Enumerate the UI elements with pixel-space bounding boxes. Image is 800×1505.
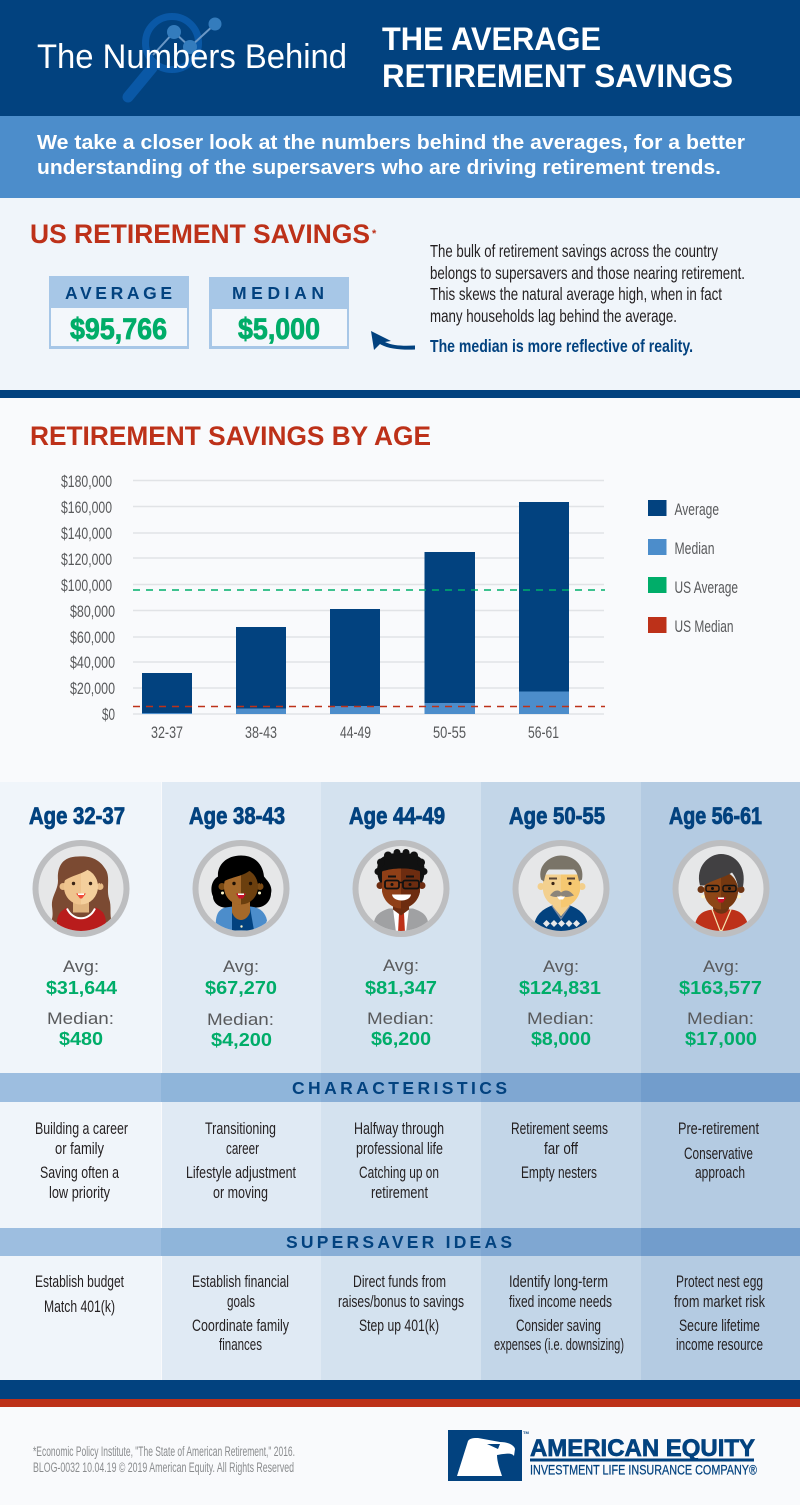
band: supersaver ideas [0, 1228, 800, 1256]
intro band [0, 116, 800, 198]
characteristics: column text: Saving often a [40, 1164, 120, 1182]
average value [46, 957, 118, 998]
supersaver ideas: column text: Direct funds from [353, 1273, 446, 1291]
characteristics: column text: or moving [213, 1184, 268, 1202]
y axis labels: $60,000 [70, 629, 115, 647]
card: median: MEDIAN [232, 283, 324, 303]
characteristics: column text: retirement [371, 1184, 428, 1202]
panel: US retirement savings [0, 198, 800, 390]
band: characteristics: CHARACTERISTICS [292, 1078, 507, 1098]
average value: $81,347 [365, 977, 437, 998]
card: average: AVERAGE [65, 283, 172, 303]
callout: median is more reflective: The median is more reflective of reality. [430, 336, 693, 356]
characteristics: column text: Retirement seems [511, 1120, 608, 1138]
text block: explanation: many households lag behind the average. [430, 306, 677, 326]
y axis labels [61, 473, 115, 724]
y axis labels: $40,000 [70, 654, 115, 672]
chart legend [648, 500, 738, 636]
median value: $4,200 [211, 1029, 272, 1050]
header banner [0, 0, 800, 116]
x axis labels: 56-61 [528, 724, 559, 742]
supersaver ideas: column text [35, 1273, 766, 1354]
characteristics: column text [35, 1120, 759, 1202]
average value [679, 957, 762, 998]
average value: Avg: [223, 957, 259, 976]
median value [527, 1009, 594, 1049]
header kicker: The Numbers Behind [37, 38, 347, 76]
heading: US retirement savings: US RETIREMENT SAVINGS [30, 219, 370, 249]
column: age 32-37 [29, 803, 130, 1049]
y axis labels: $100,000 [61, 577, 112, 595]
supersaver ideas: column text: Establish budget [35, 1273, 124, 1291]
supersaver ideas: column text: expenses (i.e. downsizing) [494, 1336, 624, 1354]
heading: Age 50-55 [509, 803, 605, 830]
chart legend: Median [674, 540, 714, 558]
logo: American Equity: TM [523, 1430, 529, 1435]
arrow pointing to median [371, 331, 415, 350]
panel: age columns background [0, 782, 800, 1380]
heading: Age 38-43 [189, 803, 285, 830]
icon: young woman avatar [32, 840, 130, 937]
x axis labels [151, 724, 559, 742]
card: average [49, 276, 189, 349]
median value: Median: [527, 1009, 594, 1028]
average value [519, 957, 601, 998]
characteristics: column text: professional life [356, 1140, 443, 1158]
supersaver ideas: column text: Identify long-term [509, 1273, 608, 1291]
median value [207, 1010, 274, 1050]
characteristics: column text: or family [55, 1140, 105, 1158]
supersaver ideas: column text: finances [219, 1336, 262, 1354]
logo: American Equity: AMERICAN EQUITY [530, 1435, 755, 1462]
heading: retirement savings by age: RETIREMENT SAVINGS BY AGE [30, 421, 431, 451]
median value: Median: [687, 1009, 754, 1028]
characteristics: column text: low priority [49, 1184, 111, 1202]
chart legend: Average [674, 501, 719, 519]
column: age 50-55 [509, 803, 610, 1049]
average value: $124,831 [519, 977, 601, 998]
median value: Median: [367, 1009, 434, 1028]
band: characteristics [0, 1073, 800, 1102]
median value: $17,000 [685, 1028, 757, 1049]
supersaver ideas: column text: goals [227, 1293, 255, 1311]
column: age 44-49 [349, 803, 450, 1049]
supersaver ideas: column text: Secure lifetime [679, 1317, 760, 1335]
supersaver ideas: column text: Consider saving [516, 1317, 601, 1335]
characteristics: column text: career [226, 1140, 259, 1158]
main title: THE AVERAGE [382, 21, 601, 57]
heading: Age 44-49 [349, 803, 445, 830]
x axis labels: 50-55 [433, 724, 466, 742]
bar chart [61, 473, 605, 742]
characteristics: column text: Conservative [684, 1145, 753, 1163]
characteristics: column text: Pre-retirement [678, 1120, 759, 1138]
supersaver ideas: column text: Match 401(k) [44, 1298, 115, 1316]
average value: Avg: [383, 956, 419, 975]
supersaver ideas: column text: income resource [676, 1336, 763, 1354]
y axis labels: $120,000 [61, 551, 112, 569]
y axis labels: $0 [102, 706, 115, 724]
chart legend: US Average [674, 579, 738, 597]
column: age 56-61 [669, 803, 770, 1049]
characteristics: column text: Lifestyle adjustment [186, 1164, 296, 1182]
icon: man with moustache avatar [512, 840, 610, 937]
x axis labels: 44-49 [340, 724, 371, 742]
supersaver ideas: column text: fixed income needs [509, 1293, 612, 1311]
icon: man with glasses and tie avatar [352, 840, 450, 937]
average value: Avg: [63, 957, 99, 976]
supersaver ideas: column text: Protect nest egg [676, 1273, 763, 1291]
chart legend: US Median [674, 618, 734, 636]
supersaver ideas: column text: raises/bonus to savings [338, 1293, 464, 1311]
y axis labels: $180,000 [61, 473, 112, 491]
main title: RETIREMENT SAVINGS [382, 58, 733, 94]
average value [365, 956, 437, 998]
y axis labels: $20,000 [70, 680, 115, 698]
median value: Median: [47, 1009, 114, 1028]
characteristics: column text: Halfway through [354, 1120, 444, 1138]
median value: $8,000 [531, 1028, 591, 1049]
average value: Avg: [703, 957, 739, 976]
median value [367, 1009, 434, 1049]
reference line: US average [133, 589, 605, 591]
logo: American Equity [448, 1430, 757, 1481]
heading: Age 56-61 [669, 803, 762, 830]
x axis labels: 38-43 [245, 724, 277, 742]
card: median [209, 277, 349, 349]
average value: $67,270 [205, 977, 277, 998]
heading: US retirement savings: * [372, 228, 377, 240]
supersaver ideas: column text: Coordinate family [192, 1317, 290, 1335]
median value: $6,200 [371, 1028, 431, 1049]
reference line: US median [133, 706, 605, 708]
median value: $480 [59, 1028, 103, 1049]
median value [47, 1009, 114, 1049]
y axis labels: $160,000 [61, 499, 112, 517]
average value: Avg: [543, 957, 579, 976]
heading: Age 32-37 [29, 803, 125, 830]
supersaver ideas: column text: Establish financial [192, 1273, 289, 1291]
average value: $31,644 [46, 977, 118, 998]
characteristics: column text: Catching up on [359, 1164, 439, 1182]
icon: magnifying glass with line chart [128, 16, 222, 97]
bars: average and median by age [142, 502, 569, 714]
characteristics: column text: Empty nesters [521, 1164, 597, 1182]
median value: Median: [207, 1010, 274, 1029]
average value [205, 957, 277, 998]
text block: explanation [430, 241, 745, 326]
x axis labels: 32-37 [151, 724, 183, 742]
supersaver ideas: column text: Step up 401(k) [359, 1317, 439, 1335]
characteristics: column text: Transitioning [205, 1120, 276, 1138]
characteristics: column text: approach [695, 1164, 745, 1182]
main title [382, 21, 733, 94]
column: age 38-43 [189, 803, 290, 1050]
intro band: We take a closer look at the numbers behind the averages, for a better [37, 132, 745, 154]
band: supersaver ideas: SUPERSAVER IDEAS [286, 1232, 512, 1252]
intro band: understanding of the supersavers who are driving retirement trends. [37, 157, 721, 179]
y axis labels: $80,000 [70, 603, 115, 621]
icon: woman with dark curly hair avatar [192, 840, 290, 937]
card: average: $95,766 [70, 313, 167, 346]
average value: $163,577 [679, 977, 762, 998]
characteristics: column text: Building a career [35, 1120, 128, 1138]
y axis labels: $140,000 [61, 525, 112, 543]
supersaver ideas: column text: from market risk [674, 1293, 766, 1311]
footer: source and copyright: BLOG-0032 10.04.19 © 2019 American Equity. All Rights Reserved [33, 1460, 294, 1475]
footer: source and copyright: *Economic Policy Institute, "The State of American Retirement," 2016. [33, 1444, 295, 1459]
footer: source and copyright [33, 1444, 295, 1475]
icon: older woman with glasses avatar [672, 840, 770, 937]
median value [685, 1009, 757, 1049]
characteristics: column text: far off [544, 1140, 578, 1158]
card: median: $5,000 [238, 313, 320, 346]
